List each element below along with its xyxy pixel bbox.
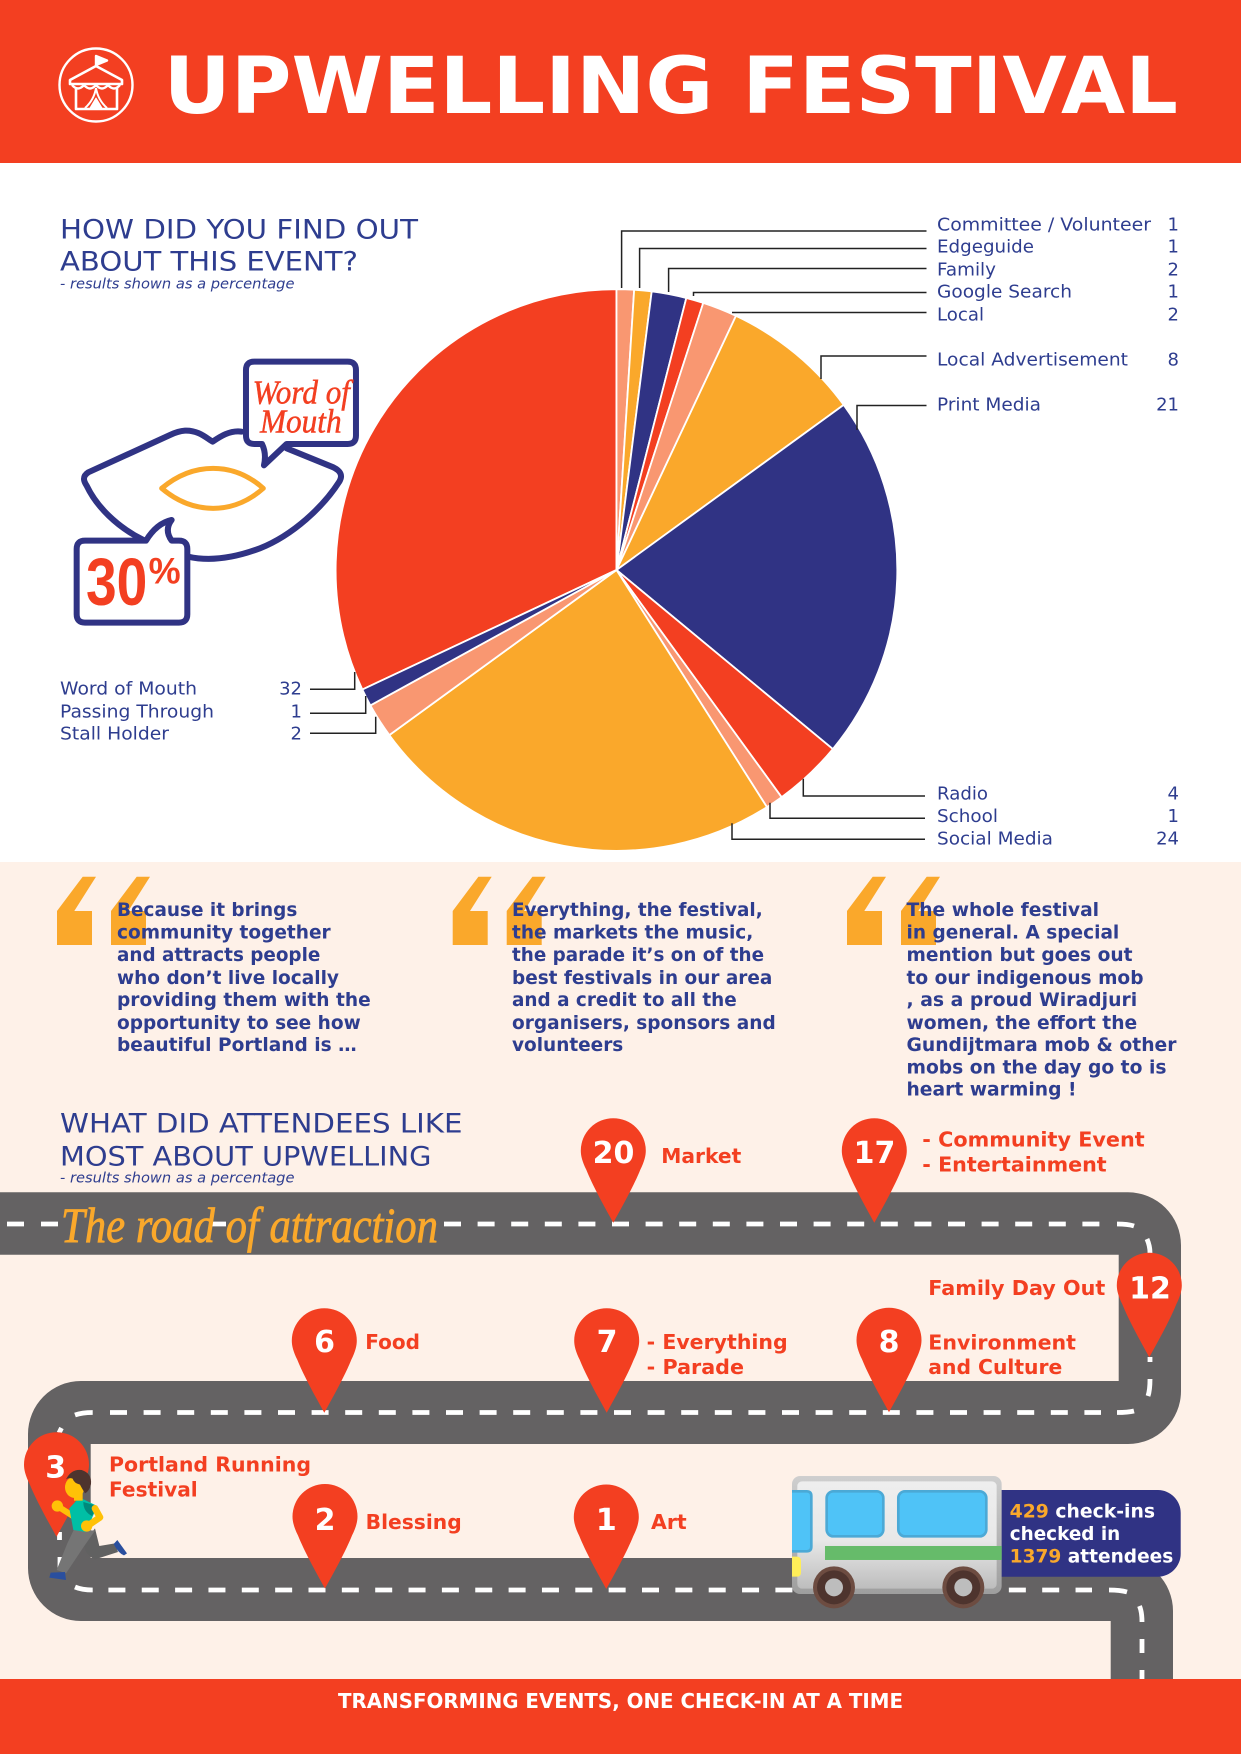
pin: everything and parade 7 <box>574 1308 788 1413</box>
heading: what did attendees like: WHAT DID ATTENDEES LIKE <box>60 1109 462 1140</box>
icon: quote marks <box>57 877 150 945</box>
road centre dashes <box>7 1224 1150 1679</box>
quote text <box>906 900 1177 1101</box>
pin: environment and culture 8: 8 <box>879 1325 899 1360</box>
bubble: 30 percent: % <box>149 549 181 591</box>
pin: food 6: Food <box>365 1330 420 1354</box>
slice: local advertisement 8 <box>616 316 844 570</box>
slice: school 1 <box>616 570 782 807</box>
icon: lips with speech bubbles <box>77 362 356 623</box>
heading: how did you find out: - results shown as a percentage <box>60 277 295 293</box>
road title: the road of attraction: The road of attraction <box>61 1197 438 1253</box>
pin: everything and parade 7: 7 <box>597 1325 617 1360</box>
legend: lower right labels: 24 <box>1156 828 1179 850</box>
slice: social media 24 <box>389 570 767 851</box>
pin: art 1: 1 <box>596 1503 617 1538</box>
lips outline <box>84 431 341 559</box>
legend: upper right labels: 2 <box>1168 304 1179 326</box>
legend: lower right labels <box>937 784 1179 850</box>
quote text: , as a proud Wiradjuri <box>906 990 1137 1011</box>
slice: radio 4 <box>616 570 833 797</box>
footer banner <box>0 1679 1241 1754</box>
quote text: in general. A special <box>906 923 1119 944</box>
slice: stall holder 2 <box>370 570 616 735</box>
legend: lower right labels: 4 <box>1168 784 1179 804</box>
legend: upper right labels: Google Search <box>937 282 1072 302</box>
pin: family day out 12 <box>928 1253 1182 1357</box>
quote text: opportunity to see how <box>117 1013 361 1034</box>
slice: google search 1 <box>616 298 703 570</box>
quote text: and attracts people <box>117 945 320 966</box>
title: UPWELLING FESTIVAL <box>164 42 1178 132</box>
quote text: providing them with the <box>117 990 371 1011</box>
header banner <box>0 0 1241 163</box>
legend: lower left labels: Word of Mouth <box>60 678 197 700</box>
bubble: word of mouth: Mouth <box>259 404 342 441</box>
pin: everything and parade 7: - Everything <box>647 1330 788 1354</box>
pin: portland running festival 3: 3 <box>45 1451 66 1486</box>
quote 1 <box>57 877 371 1056</box>
pin: blessing 2 <box>292 1484 462 1588</box>
slice: word of mouth 32 <box>336 289 616 690</box>
pin: portland running festival 3: Portland Running <box>109 1453 311 1477</box>
quote text: The whole festival <box>906 900 1099 921</box>
pin: everything and parade 7: - Parade <box>647 1355 744 1379</box>
legend: upper right labels: Committee / Volunteer <box>937 214 1152 236</box>
quote text <box>512 900 776 1056</box>
icon: festival tent <box>60 48 132 122</box>
legend: upper right labels: Print Media <box>937 394 1041 416</box>
legend: upper right labels: Family <box>937 260 996 280</box>
slice: print media 21 <box>616 405 897 749</box>
legend: lower left labels <box>60 678 302 744</box>
pin: environment and culture 8 <box>856 1308 1076 1412</box>
heading: how did you find out: HOW DID YOU FIND OUT <box>60 215 419 246</box>
quote text: beautiful Portland is … <box>117 1035 357 1056</box>
quote text: mobs on the day go to is <box>906 1058 1167 1078</box>
pin: food 6 <box>292 1308 420 1413</box>
slice: committee / volunteer 1 <box>616 289 634 570</box>
slice: edgeguide 1 <box>616 290 652 570</box>
quote text: the parade it’s on of the <box>512 945 764 966</box>
pin: community event and entertainment 17: - Community Event <box>922 1128 1145 1152</box>
legend: lower left labels: 32 <box>279 678 302 700</box>
bubble: 30 percent <box>77 520 187 623</box>
pin: food 6: 6 <box>314 1325 335 1360</box>
pin: community event and entertainment 17: 17 <box>854 1136 895 1171</box>
legend: upper right labels: Edgeguide <box>937 236 1034 258</box>
pin: community event and entertainment 17: - Entertainment <box>922 1153 1107 1177</box>
quote text <box>117 900 371 1056</box>
legend: lower right labels: Social Media <box>937 828 1053 850</box>
pin: portland running festival 3: Festival <box>109 1478 198 1502</box>
quote text: women, the effort the <box>906 1013 1137 1034</box>
quote text: Everything, the festival, <box>512 900 763 921</box>
legend: upper right labels: 1 <box>1168 282 1179 302</box>
legend: upper right labels: 2 <box>1168 260 1179 280</box>
pin: community event and entertainment 17 <box>842 1118 1145 1223</box>
legend: upper right labels <box>937 214 1179 416</box>
quote text: Because it brings <box>117 900 297 921</box>
quote 3 <box>847 877 1177 1101</box>
pin: portland running festival 3 <box>24 1432 311 1537</box>
quote text: organisers, sponsors and <box>512 1013 776 1034</box>
pin: market 20: Market <box>661 1144 742 1168</box>
quote text: to our indigenous mob <box>906 968 1144 989</box>
legend: upper right labels: Local Advertisement <box>937 350 1128 370</box>
pin: art 1: Art <box>651 1510 687 1534</box>
quote text: who don’t live locally <box>117 968 339 989</box>
legend: upper right labels: 8 <box>1168 350 1179 370</box>
bubble: 30 percent: 30 <box>86 546 147 620</box>
callout: check-in stats: 429 check-ins <box>1010 1502 1155 1523</box>
legend: lower left labels: Stall Holder <box>60 724 170 744</box>
pin: environment and culture 8: Environment <box>928 1330 1076 1354</box>
callout: check-in stats <box>1001 1490 1181 1577</box>
icon: bus <box>792 1476 1002 1608</box>
icon: quote marks <box>847 877 940 945</box>
callout: check-in stats: 1379 attendees <box>1010 1547 1173 1568</box>
legend: lower left labels: 1 <box>291 702 302 722</box>
quote text: and a credit to all the <box>512 990 737 1011</box>
footer banner: TRANSFORMING EVENTS, ONE CHECK-IN AT A TIME <box>338 1689 903 1713</box>
legend: upper right labels: 1 <box>1168 214 1179 236</box>
pin: blessing 2: 2 <box>315 1503 335 1538</box>
heading: how did you find out: ABOUT THIS EVENT? <box>60 247 358 278</box>
road <box>0 1192 1181 1679</box>
heading: how did you find out <box>60 215 419 293</box>
slice: family 2 <box>616 291 686 570</box>
cream background panel <box>0 862 1241 1679</box>
quote text: best festivals in our area <box>512 968 772 989</box>
callout: check-in stats: checked in <box>1010 1524 1120 1545</box>
legend: lower right labels: School <box>937 806 998 827</box>
pin: family day out 12: 12 <box>1129 1271 1171 1306</box>
pin: art 1 <box>574 1484 687 1589</box>
legend: lower left labels: Passing Through <box>60 702 214 722</box>
icon: runner <box>49 1470 127 1580</box>
legend: upper right labels: Local <box>937 304 984 326</box>
legend: lower left labels: 2 <box>291 724 302 744</box>
legend: upper right labels: 21 <box>1156 394 1179 416</box>
legend: lower right labels: 1 <box>1168 806 1179 827</box>
icon: quote marks <box>453 877 546 945</box>
mouth centre <box>162 468 263 508</box>
quote text: volunteers <box>512 1035 623 1056</box>
bubble: word of mouth <box>246 362 356 465</box>
pie leader lines <box>310 231 926 839</box>
legend: upper right labels: 1 <box>1168 236 1179 258</box>
quote text: community together <box>117 923 332 944</box>
pin: family day out 12: Family Day Out <box>928 1276 1106 1300</box>
quote text: the markets the music, <box>512 923 753 944</box>
bubble: word of mouth: Word of <box>253 374 354 411</box>
heading: what did attendees like: MOST ABOUT UPWELLING <box>60 1142 432 1173</box>
heading: what did attendees like <box>60 1109 462 1187</box>
pin: market 20 <box>581 1118 742 1223</box>
quote text: Gundijtmara mob & other <box>906 1035 1177 1056</box>
pin: market 20: 20 <box>593 1136 634 1171</box>
quote 2 <box>453 877 776 1056</box>
slice: passing through 1 <box>362 570 616 705</box>
quote text: heart warming ! <box>906 1080 1076 1101</box>
slice: local 2 <box>616 303 736 570</box>
quote text: mention but goes out <box>906 945 1133 966</box>
heading: what did attendees like: - results shown as a percentage <box>60 1171 295 1187</box>
legend: lower right labels: Radio <box>937 784 988 804</box>
pin: environment and culture 8: and Culture <box>928 1355 1062 1379</box>
pin: blessing 2: Blessing <box>366 1510 462 1534</box>
pie chart: how attendees found out <box>336 289 897 851</box>
